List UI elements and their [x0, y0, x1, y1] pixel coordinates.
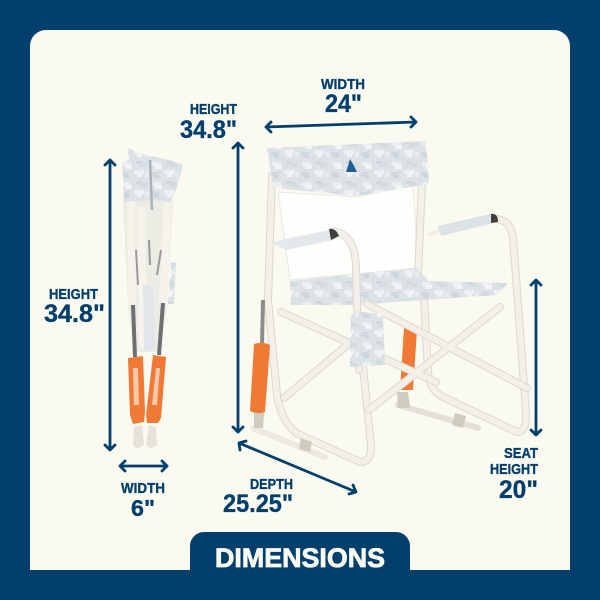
folded chair: right orange grip	[146, 355, 166, 423]
arrow: chair width	[266, 117, 416, 132]
chair: cross braces	[281, 304, 527, 410]
chair: arm caps	[329, 214, 498, 240]
folded chair: pouch	[143, 285, 155, 350]
chair: right armrest	[438, 214, 494, 236]
heading tab	[190, 532, 410, 573]
label: folded height	[44, 286, 105, 328]
label: seat height: SEAT	[504, 445, 538, 462]
label: folded height: 34.8"	[44, 300, 105, 328]
folded chair: left orange grip	[128, 356, 145, 424]
folded chair: fabric fold shadow	[150, 160, 152, 210]
label: seat height: 20"	[499, 476, 538, 504]
chair: right foot bar	[397, 392, 478, 428]
chair: left foot bar	[253, 413, 325, 457]
chair: left orange grip	[250, 343, 270, 413]
label: folded width	[121, 480, 165, 521]
label: chair width: 24"	[325, 90, 362, 118]
arrow: depth	[239, 441, 356, 494]
folded chair: side pouch	[168, 262, 176, 304]
label: seat height: HEIGHT	[490, 461, 538, 478]
folded chair: frame tubes	[131, 198, 168, 345]
chair: left arm and front leg	[332, 232, 359, 370]
chair: back post and left rocker	[268, 175, 371, 462]
arrow: seat height	[531, 280, 541, 435]
folded chair: camo fabric	[122, 148, 183, 202]
label: chair height	[180, 101, 237, 144]
chair	[250, 141, 527, 462]
folded chair: feet	[133, 425, 157, 449]
label: folded width: 6"	[131, 495, 155, 521]
arrow: folded height	[105, 160, 115, 450]
label: folded width: WIDTH	[121, 480, 165, 497]
label: depth	[223, 476, 293, 518]
chair: left armrest	[272, 230, 334, 250]
arrow: folded width	[120, 461, 167, 471]
label: chair height: 34.8"	[180, 116, 237, 144]
folded chair	[122, 148, 183, 449]
chair: pouch	[350, 311, 385, 367]
folded chair: body	[123, 198, 173, 352]
label: depth: DEPTH	[250, 476, 293, 493]
chair: logo	[346, 159, 357, 172]
folded chair: grip labels	[133, 368, 160, 405]
label: chair width: WIDTH	[321, 76, 365, 93]
label: folded height: HEIGHT	[49, 286, 98, 303]
label: chair height: HEIGHT	[190, 101, 237, 118]
chair: right orange grip	[400, 328, 417, 390]
arrow: chair height	[233, 143, 243, 432]
heading text: DIMENSIONS	[215, 543, 385, 573]
chair: mesh back	[278, 185, 418, 280]
chair: camo back panel	[267, 141, 429, 196]
chair: right arm connector	[428, 231, 440, 235]
folded chair: metal rods	[133, 303, 163, 357]
label: depth: 25.25"	[223, 490, 293, 518]
chair: right back post	[418, 183, 422, 275]
label: seat height	[490, 445, 538, 504]
chair: rear legs and rocker	[423, 219, 526, 432]
label: chair width	[321, 76, 365, 118]
chair: metal rod	[262, 300, 263, 345]
chair: camo seat	[290, 268, 508, 305]
